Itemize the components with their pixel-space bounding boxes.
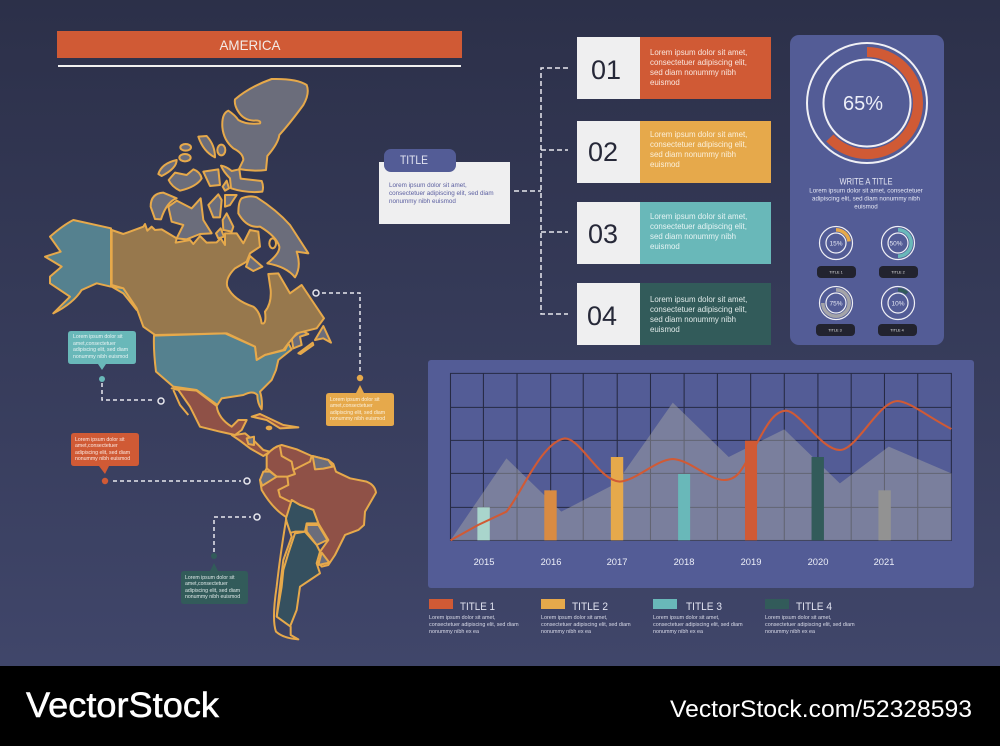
callout: teal North America: adipiscing elit, sed diam <box>73 347 128 353</box>
legend 3: nonummy nibh ex ea <box>653 629 703 635</box>
arctic islands <box>151 79 331 354</box>
callout: teal North America: nonummy nibh euismod <box>73 354 128 360</box>
United States <box>154 333 292 409</box>
year labels <box>474 556 894 567</box>
card 02: 02 <box>588 137 618 167</box>
Alaska panhandle <box>112 287 140 310</box>
footer bar <box>0 666 1000 746</box>
title pills <box>816 266 918 336</box>
card 02: sed diam nonummy nibh <box>650 150 736 159</box>
Bolivia <box>286 500 318 533</box>
title: AMERICA <box>220 37 281 53</box>
grid <box>450 373 951 540</box>
callout: red <box>71 433 250 484</box>
card 03 <box>577 202 771 264</box>
year labels: 2016 <box>541 556 561 567</box>
card 02: consectetuer adipiscing elit, <box>650 140 747 149</box>
title pills: TITLE 3 <box>828 328 842 332</box>
callout: dark green: amet,consectetuer <box>185 581 228 587</box>
panel: chart <box>428 360 974 588</box>
callout: orange: amet,consectetuer <box>330 403 373 409</box>
ring 10%: 10% <box>891 300 905 308</box>
legend 2: nonummy nibh ex ea <box>541 629 591 635</box>
card 01: consectetuer adipiscing elit, <box>650 58 747 67</box>
callout: red: nonummy nibh euismod <box>75 456 130 462</box>
Ecuador <box>260 472 277 486</box>
legend 3: TITLE 3 <box>686 601 722 613</box>
title <box>57 31 462 67</box>
Guianas <box>313 456 333 469</box>
callout: orange: nonummy nibh euismod <box>330 416 385 422</box>
footer bar: VectorStock.com/52328593 <box>670 696 972 723</box>
legend 4 <box>765 599 855 635</box>
legend 4: Lorem ipsum dolor sit amet, <box>765 615 832 621</box>
panel: progress <box>790 35 944 345</box>
Chile <box>274 520 298 639</box>
callout: orange <box>313 290 394 426</box>
legend 2: consectetuer adipiscing elit, sed diam <box>541 622 631 628</box>
card 04: 04 <box>587 301 617 331</box>
callout: red: adipiscing elit, sed diam <box>75 450 130 456</box>
Canada <box>112 224 324 360</box>
ring 75%: 75% <box>829 300 843 308</box>
card 04: Lorem ipsum dolor sit amet, <box>650 295 747 304</box>
year labels: 2021 <box>874 556 894 567</box>
card 02: euismod <box>650 160 680 169</box>
legend 2: Lorem ipsum dolor sit amet, <box>541 615 608 621</box>
callout: dark green: adipiscing elit, sed diam <box>185 588 240 594</box>
Caribbean islands <box>252 414 298 428</box>
callout: teal North America: amet,consectetuer <box>73 341 116 347</box>
year labels: 2017 <box>607 556 627 567</box>
legend 4: consectetuer adipiscing elit, sed diam <box>765 622 855 628</box>
line series <box>450 401 951 540</box>
Alaska <box>45 220 111 313</box>
card 03: euismod <box>650 242 680 251</box>
card 03: 03 <box>588 219 618 249</box>
Uruguay <box>318 553 329 565</box>
card 01: sed diam nonummy nibh <box>650 68 736 77</box>
legend 4: TITLE 4 <box>796 601 832 613</box>
Mexico and Central America <box>172 388 376 639</box>
year labels: 2018 <box>674 556 694 567</box>
legend 3: Lorem ipsum dolor sit amet, <box>653 615 720 621</box>
write a title text: WRITE A TITLE <box>840 176 892 188</box>
card 01 <box>577 37 771 99</box>
legend 1 <box>429 599 519 635</box>
connector lines <box>514 68 568 314</box>
legend 3: consectetuer adipiscing elit, sed diam <box>653 622 743 628</box>
big ring 65%: 65% <box>843 93 883 115</box>
legend 1: TITLE 1 <box>460 601 495 613</box>
write a title text: Lorem ipsum dolor sit amet, consectetuer <box>809 188 923 194</box>
legend 4: nonummy nibh ex ea <box>765 629 815 635</box>
write a title text: euismod <box>854 204 878 210</box>
callout: red: amet,consectetuer <box>75 443 118 449</box>
panel: title box: consectetuer adipiscing elit, sed diam <box>389 190 494 197</box>
year labels: 2020 <box>808 556 828 567</box>
panel: title box <box>379 149 510 224</box>
year labels: 2015 <box>474 556 494 567</box>
card 04: sed diam nonummy nibh <box>650 315 736 324</box>
callout: teal North America: Lorem ipsum dolor sit <box>73 334 123 340</box>
footer bar: VectorStock <box>26 686 220 725</box>
callout: orange: Lorem ipsum dolor sit <box>330 397 380 403</box>
map of the Americas <box>45 79 376 639</box>
callout: dark green: Lorem ipsum dolor sit <box>185 575 235 581</box>
card 01: Lorem ipsum dolor sit amet, <box>650 48 747 57</box>
legend 2 <box>541 599 631 635</box>
card 04: euismod <box>650 325 680 334</box>
card 03: sed diam nonummy nibh <box>650 232 736 241</box>
title pills: TITLE 4 <box>890 328 904 332</box>
callout: dark green <box>181 514 260 604</box>
bars <box>477 441 891 540</box>
title pills: TITLE 1 <box>829 270 843 274</box>
ring 75% <box>820 286 852 320</box>
ring 15% <box>820 226 852 260</box>
card 03: Lorem ipsum dolor sit amet, <box>650 212 747 221</box>
panel: title box: TITLE <box>400 153 428 167</box>
card 01: 01 <box>591 55 621 85</box>
title pills: TITLE 2 <box>891 270 905 274</box>
ring 15%: 15% <box>829 240 843 248</box>
Paraguay <box>307 525 327 545</box>
write a title text <box>809 176 923 210</box>
legend 3 <box>653 599 743 635</box>
ring 10% <box>882 286 914 320</box>
chart plot <box>450 373 951 540</box>
ring 50% <box>882 226 914 260</box>
panel: title box: nonummy nibh euismod <box>389 198 456 205</box>
card 04 <box>577 283 771 345</box>
legend 1: consectetuer adipiscing elit, sed diam <box>429 622 519 628</box>
Argentina <box>277 532 320 627</box>
card 03: consectetuer adipiscing elit, <box>650 222 747 231</box>
card 01: euismod <box>650 78 680 87</box>
callout: teal North America <box>68 331 164 404</box>
legend 1: nonummy nibh ex ea <box>429 629 479 635</box>
ring 50%: 50% <box>889 240 903 248</box>
panel: title box: Lorem ipsum dolor sit amet, <box>389 182 467 189</box>
card 02 <box>577 121 771 183</box>
card 04: consectetuer adipiscing elit, <box>650 305 747 314</box>
big ring 65% <box>807 43 927 163</box>
callout: dark green: nonummy nibh euismod <box>185 594 240 600</box>
area series <box>450 403 951 540</box>
write a title text: adipiscing elit, sed diam nonummy nibh <box>812 196 921 202</box>
South America: Brazil and north <box>260 445 376 567</box>
card 02: Lorem ipsum dolor sit amet, <box>650 130 747 139</box>
year labels: 2019 <box>741 556 761 567</box>
callout: orange: adipiscing elit, sed diam <box>330 410 385 416</box>
callout: red: Lorem ipsum dolor sit <box>75 437 125 443</box>
legend 2: TITLE 2 <box>572 601 608 613</box>
legend 1: Lorem ipsum dolor sit amet, <box>429 615 496 621</box>
